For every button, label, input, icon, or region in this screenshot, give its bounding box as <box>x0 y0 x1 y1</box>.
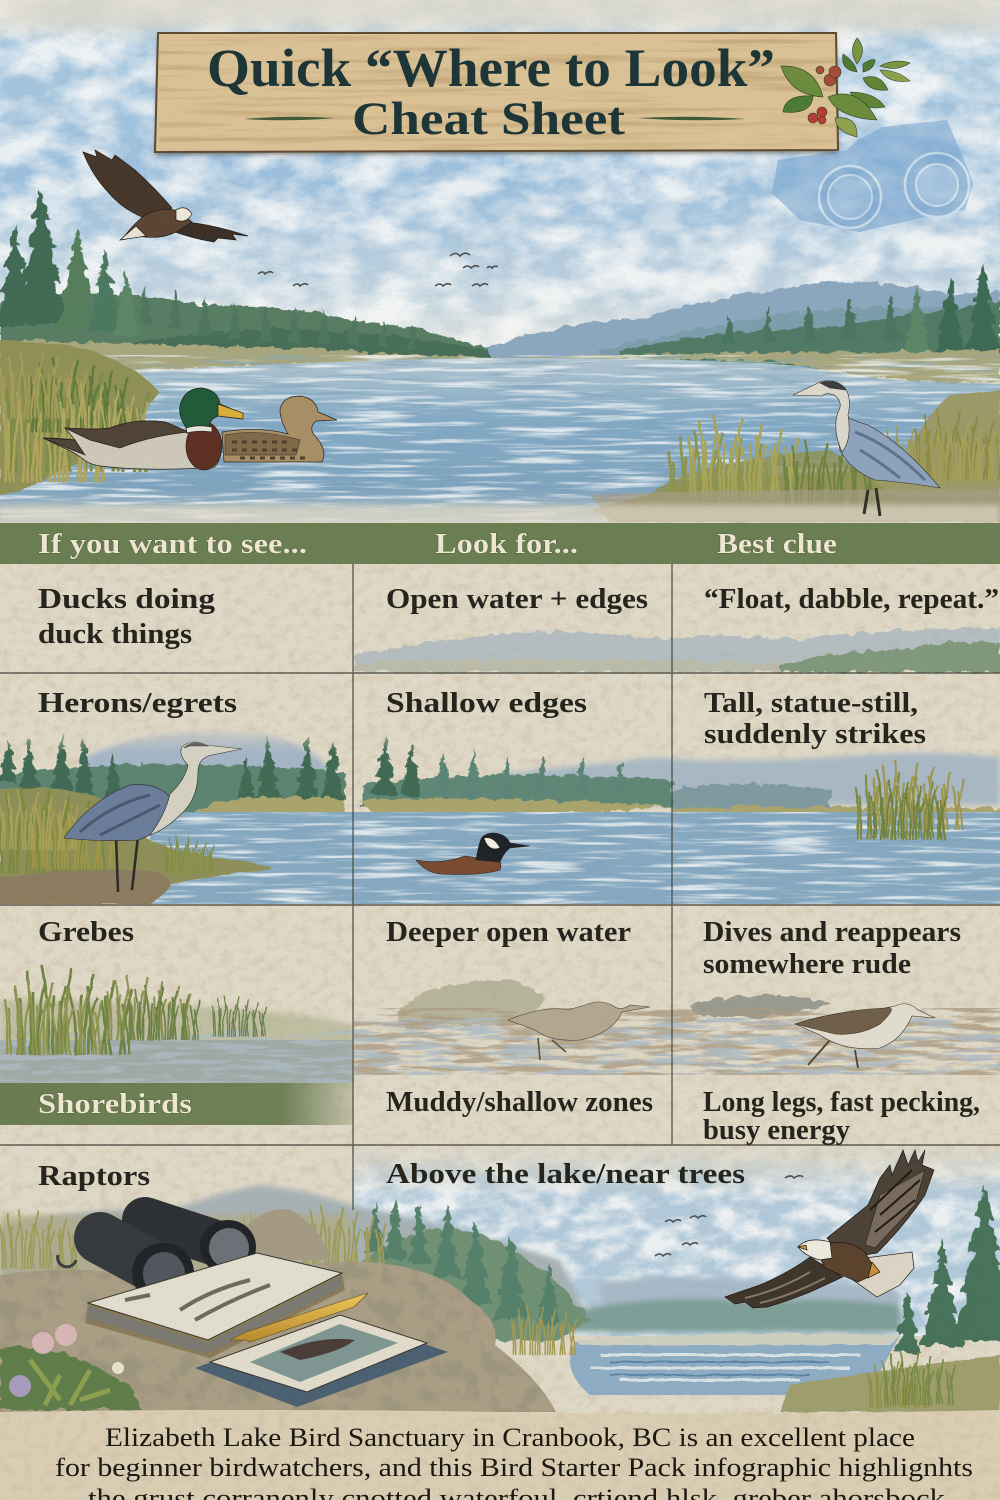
far banks <box>195 795 1000 812</box>
left conifers <box>0 190 140 336</box>
row: herons: suddenly strikes <box>704 718 926 750</box>
icon: faded off-road vehicle watermark <box>772 120 973 232</box>
left meadow <box>0 1215 350 1275</box>
row: ducks: Ducks doing <box>38 583 216 615</box>
mud flats middle and right <box>354 980 1000 1075</box>
reeds left <box>0 787 272 905</box>
grass and stream in first column <box>0 965 353 1083</box>
illustration: field guide <box>195 1315 448 1407</box>
illustration: heron <box>64 742 242 892</box>
row: grebes: somewhere rude <box>703 948 911 980</box>
male mallard <box>43 388 243 470</box>
header: look for: Look for... <box>435 528 578 560</box>
row: grebes: Deeper open water <box>386 916 631 948</box>
sky <box>0 0 1000 360</box>
title line 2: Cheat Sheet <box>352 93 625 145</box>
illustration: flying eagle, upper left <box>83 150 248 242</box>
sky and clouds right <box>354 1146 1000 1336</box>
reeds right <box>856 760 964 840</box>
distant mountains <box>480 282 1000 360</box>
wildflower patch <box>0 1324 140 1410</box>
row: ducks: Open water + edges <box>386 583 648 615</box>
lower wing <box>725 1257 843 1308</box>
row: ducks <box>38 583 999 650</box>
flock of distant birds <box>258 253 498 286</box>
body <box>815 1242 877 1282</box>
table grid lines <box>0 564 1000 1210</box>
right conifers <box>903 262 1000 355</box>
hills <box>80 731 1000 805</box>
shorebirds band <box>0 1083 353 1125</box>
right grass shore <box>780 1350 1000 1412</box>
left grass <box>0 1205 386 1270</box>
illustration: open sketch notebook <box>85 1253 345 1358</box>
tree line <box>0 735 830 815</box>
rocky outcrop <box>0 1209 577 1415</box>
row: herons: Herons/egrets <box>38 687 237 719</box>
forest line left <box>0 286 490 364</box>
lake <box>0 355 1000 522</box>
head <box>798 1240 832 1260</box>
row: ducks: duck things <box>38 618 192 650</box>
row: shorebirds: Muddy/shallow zones <box>386 1086 653 1118</box>
header: best clue: Best clue <box>717 528 837 560</box>
table paper background <box>0 523 1000 1423</box>
row: shorebirds: busy energy <box>703 1114 850 1146</box>
illustration: mallard pair <box>43 388 337 470</box>
bottom foreground fade <box>0 505 1000 525</box>
water <box>150 812 1000 904</box>
row: herons <box>38 687 926 750</box>
forest <box>340 1200 590 1340</box>
female mallard <box>222 396 337 462</box>
row: grebes: Grebes <box>38 916 134 948</box>
row: grebes: Dives and reappears <box>703 916 961 948</box>
table header band <box>0 523 1000 564</box>
row: herons: Shallow edges <box>386 687 587 719</box>
wooden sign <box>155 33 838 152</box>
row: shorebirds: Shorebirds <box>38 1088 192 1120</box>
illustration: plain sandpiper <box>508 1002 650 1060</box>
illustration: great blue heron <box>793 381 940 516</box>
small distant birds <box>655 1176 803 1256</box>
row 2 scene: herons and shallow edges <box>0 731 1000 905</box>
right reeds bank <box>590 390 1000 522</box>
upper wing <box>827 1150 934 1258</box>
row: shorebirds: Long legs, fast pecking, <box>703 1086 980 1118</box>
table text <box>38 583 999 1192</box>
far shore strip <box>0 340 1000 382</box>
illustration: speckled sandpiper <box>795 1004 935 1068</box>
row: herons: Tall, statue-still, <box>704 687 918 719</box>
hero lake scene <box>0 0 1000 525</box>
illustration: yellow pencil <box>230 1293 368 1342</box>
row: raptors: Raptors <box>38 1160 150 1192</box>
title rule left <box>244 117 335 120</box>
title plank <box>155 33 910 152</box>
title line 1: Quick “Where to Look” <box>207 38 775 98</box>
footer text: for beginner birdwatchers, and this Bird Starter Pack infographic highlignhts <box>55 1453 973 1482</box>
illustration: bald eagle <box>725 1150 934 1308</box>
header: if you want to see: If you want to see... <box>38 528 307 560</box>
row: raptors: Above the lake/near trees <box>386 1158 745 1190</box>
tail <box>853 1252 914 1297</box>
illustration: binoculars <box>58 1220 256 1303</box>
footer text <box>55 1423 973 1500</box>
row: raptors <box>38 1158 745 1192</box>
row: ducks: “Float, dabble, repeat.” <box>704 583 999 615</box>
row: grebes <box>38 916 961 980</box>
footer text: Elizabeth Lake Bird Sanctuary in Cranbook, BC is an excellent place <box>105 1423 915 1452</box>
row: shorebirds <box>38 1086 980 1146</box>
footer paper <box>0 1410 1000 1500</box>
row 1 mini landscape <box>354 628 1000 672</box>
illustration: grebe <box>416 833 530 874</box>
forest line right <box>620 292 1000 370</box>
lake <box>570 1333 900 1395</box>
raptors scene <box>0 1146 1000 1415</box>
row 3 grass and mud <box>0 965 1000 1083</box>
left reeds bank <box>0 340 160 495</box>
right conifers <box>894 1185 1000 1353</box>
title rule right <box>637 117 746 120</box>
distant hills <box>0 1185 900 1332</box>
icon: leaves and berries <box>781 38 910 137</box>
